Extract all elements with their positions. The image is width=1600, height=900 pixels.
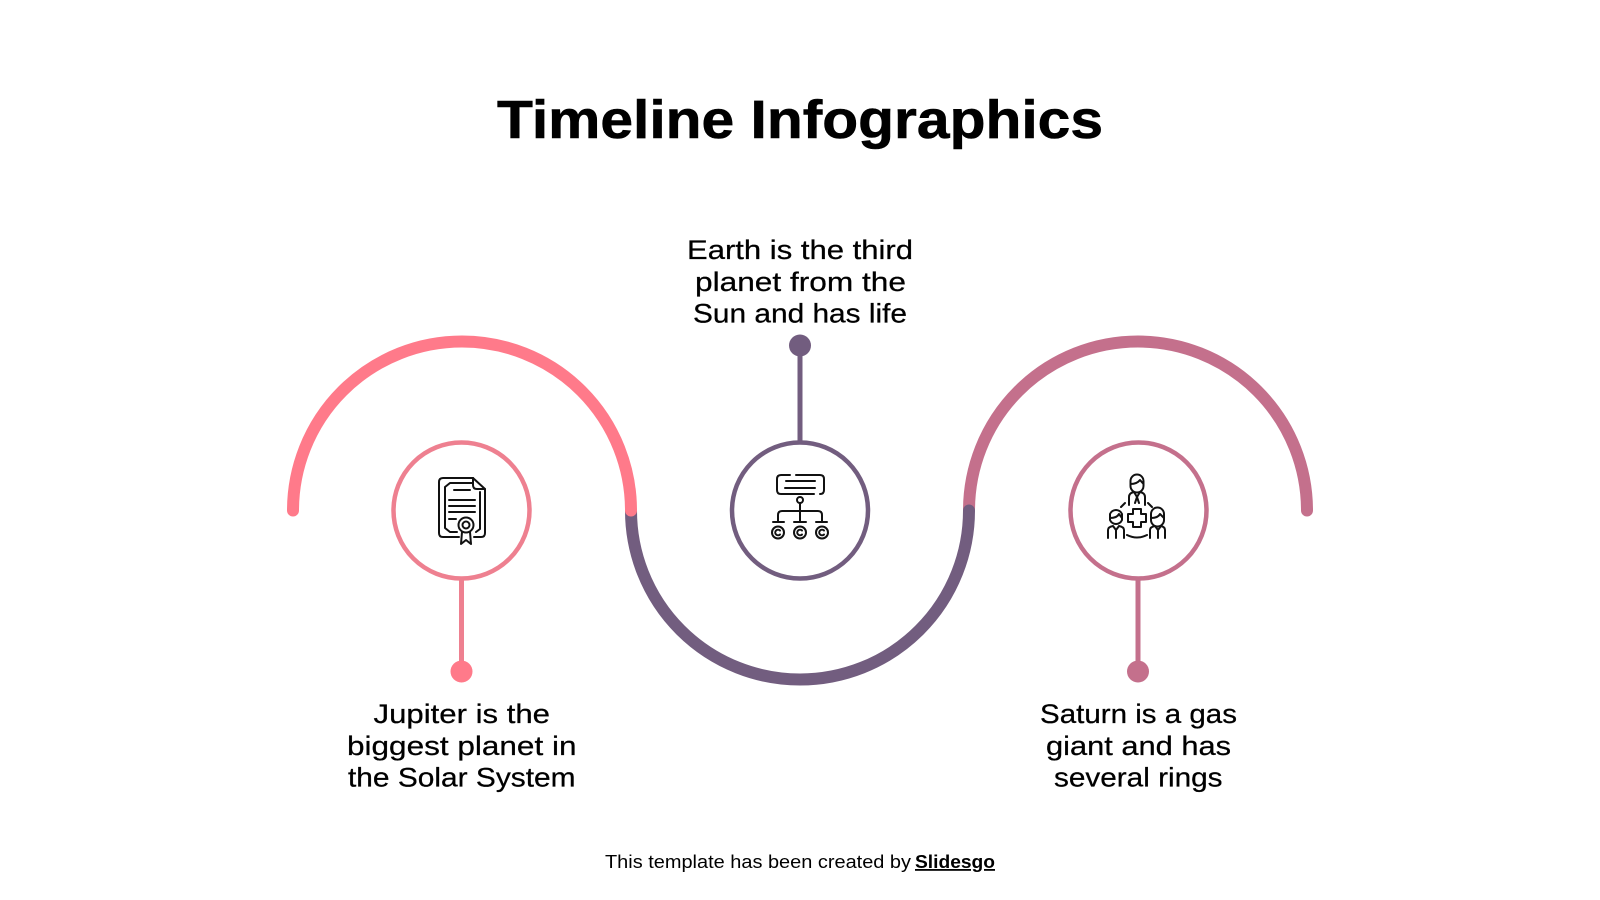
text: Saturn <box>1040 699 1237 792</box>
text: Saturn: several rings <box>1054 762 1222 792</box>
footer credit: This template has been created by <box>605 852 911 872</box>
text: Jupiter: Jupiter is the <box>374 699 550 729</box>
title: Timeline Infographics <box>497 90 1103 150</box>
pin: Earth <box>789 334 811 442</box>
icon: medical team <box>1108 474 1165 538</box>
circle: Jupiter <box>394 442 530 578</box>
icon: hierarchy <box>772 475 828 538</box>
pin: Jupiter <box>450 578 472 682</box>
purple arc <box>631 510 969 680</box>
rose arc <box>969 342 1307 510</box>
text: Saturn: giant and has <box>1046 731 1231 761</box>
circle: Saturn <box>1070 442 1206 578</box>
text: Jupiter: biggest planet in <box>347 731 576 761</box>
text: Saturn: Saturn is a gas <box>1040 699 1237 729</box>
text: Earth: Earth is the third <box>687 235 913 265</box>
text: Jupiter <box>347 699 576 792</box>
icon: certificate <box>439 478 485 544</box>
pink arc <box>293 342 631 510</box>
text: Jupiter: the Solar System <box>348 762 576 792</box>
text: Earth <box>687 235 913 328</box>
pin: Saturn <box>1127 578 1149 682</box>
text: Earth: Sun and has life <box>693 298 907 328</box>
circle: Earth <box>732 442 868 578</box>
text: Earth: planet from the <box>695 267 906 297</box>
footer credit: Slidesgo <box>915 852 995 872</box>
